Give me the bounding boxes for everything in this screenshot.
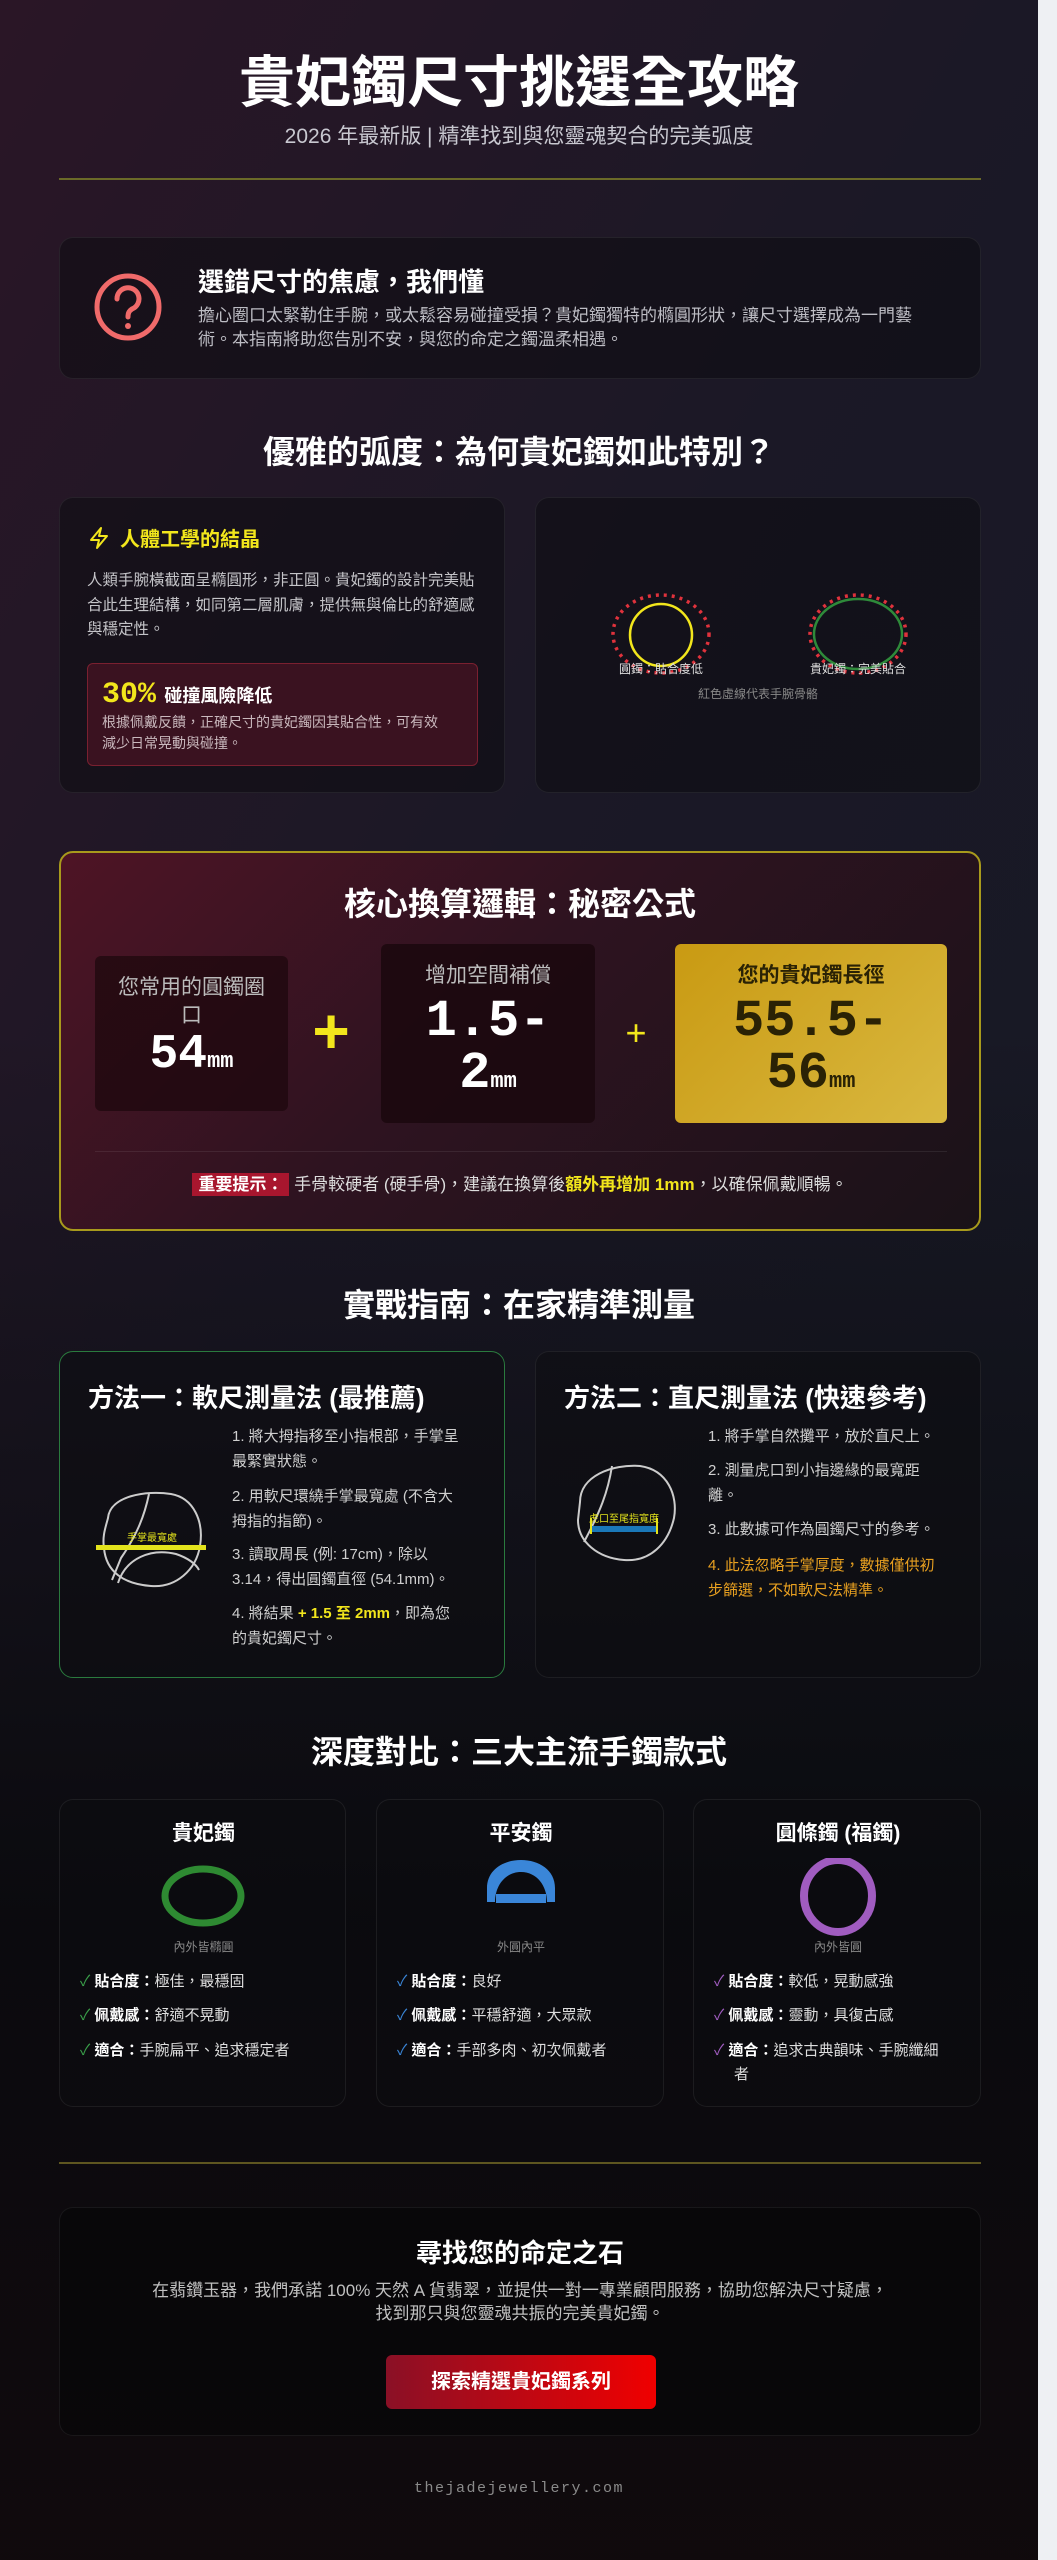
- heading: 核心換算邏輯：秘密公式: [344, 886, 696, 922]
- box: compensation: [381, 944, 595, 1123]
- box: compensation: 2mm: [459, 1044, 517, 1103]
- box: result: 56mm: [767, 1044, 855, 1103]
- stat callout: 30% 碰撞風險降低: [102, 678, 272, 712]
- stat callout: 根據佩戴反饋，正確尺寸的貴妃鐲因其貼合性，可有效減少日常晃動與碰撞。: [102, 714, 438, 751]
- panel: ping an: ✓ 貼合度：良好: [397, 1973, 501, 1990]
- panel: round bangle: 圓條鐲 (福鐲): [776, 1822, 900, 1845]
- panel: guifei: ✓ 佩戴感：舒適不晃動: [80, 2007, 229, 2024]
- icon: plus: +: [312, 995, 350, 1067]
- heading: measuring: 實戰指南：在家精準測量: [343, 1287, 695, 1323]
- panel: ping an: ✓ 佩戴感：平穩舒適，大眾款: [397, 2007, 591, 2024]
- diagram: [611, 593, 908, 701]
- title: 貴妃鐲尺寸挑選全攻略: [239, 51, 799, 114]
- box: compensation: 增加空間補償: [425, 964, 551, 987]
- box: current size: [95, 956, 288, 1111]
- steps: 1. 將手掌自然攤平，放於直尺上。: [708, 1428, 935, 1445]
- button: [386, 2355, 656, 2409]
- panel: CTA: 在翡鑽玉器，我們承諾 100% 天然 A 貨翡翠，並提供一對一專業顧問服務，協助您解決尺寸疑慮，: [152, 2281, 888, 2300]
- stat callout: [87, 663, 478, 766]
- heading: why special: 優雅的弧度：為何貴妃鐲如此特別？: [263, 434, 775, 470]
- button: 探索精選貴妃鐲系列: [431, 2371, 611, 2393]
- tip: 重要提示： 手骨較硬者 (硬手骨)，建議在換算後額外再增加 1mm，以確保佩戴順暢。: [198, 1175, 848, 1194]
- box: current size: 54mm: [149, 1028, 234, 1082]
- icon: question: [94, 274, 162, 340]
- footer: thejadejewellery.com: [414, 2480, 624, 2497]
- heading: 人體工學的結晶: [120, 529, 260, 551]
- features: ✓ 貼合度：極佳，最穩固: [80, 1973, 244, 1990]
- text: 人類手腕橫截面呈橢圓形，非正圓。貴妃鐲的設計完美貼合此生理結構，如同第二層肌膚，提供無與倫比的舒適感與穩定性。: [87, 572, 475, 638]
- heading: 方法一：軟尺測量法 (最推薦): [88, 1383, 425, 1413]
- panel: ping an: ✓ 適合：手部多肉、初次佩戴者: [397, 2042, 606, 2059]
- diagram: 紅色虛線代表手腕骨骼: [698, 686, 818, 701]
- panel: method 1: 2. 用軟尺環繞手掌最寬處 (不含大拇指的指節)。: [232, 1488, 453, 1530]
- panel: method 2: [535, 1351, 981, 1678]
- icon: round bangle: [800, 1858, 876, 1936]
- heading: 選錯尺寸的焦慮，我們懂: [198, 267, 484, 297]
- icon: plus small: +: [625, 1012, 647, 1053]
- panel: ping an: 平安鐲: [490, 1822, 552, 1845]
- icon: hand ruler: 虎口至尾指寬度: [589, 1512, 659, 1525]
- panel: method 1: 4. 將結果 + 1.5 至 2mm，即為您的貴妃鐲尺寸。: [232, 1605, 450, 1646]
- diagram: 圓鐲：貼合度低: [619, 661, 703, 676]
- panel: ping an: 外圓內平: [497, 1940, 545, 1954]
- panel: CTA: 尋找您的命定之石: [416, 2238, 624, 2268]
- panel: method 2: 3. 此數據可作為圓鐲尺寸的參考。: [708, 1521, 935, 1538]
- panel: method 1: 3. 讀取周長 (例: 17cm)，除以 3.14，得出圓鐲直徑 (54.1mm)。: [232, 1546, 450, 1588]
- heading: 方法二：直尺測量法 (快速參考): [564, 1383, 927, 1413]
- panel: guifei: 內外皆橢圓: [173, 1940, 234, 1954]
- panel: guifei: 貴妃鐲: [172, 1822, 235, 1845]
- panel: round bangle: [693, 1799, 981, 2107]
- panel: shape diagram: [535, 497, 981, 793]
- panel: CTA: 找到那只與您靈魂共振的完美貴妃鐲。: [376, 2304, 664, 2323]
- box: compensation: 1.5-: [426, 992, 550, 1051]
- panel: round bangle: ✓ 佩戴感：靈動，具復古感: [714, 2007, 893, 2024]
- icon: hand soft tape: [96, 1492, 206, 1588]
- panel: round bangle: ✓ 貼合度：較低，晃動感強: [714, 1973, 893, 1990]
- icon: oval bangle: [162, 1866, 244, 1926]
- panel: method 2: 4. 此法忽略手掌厚度，數據僅供初步篩選，不如軟尺法精準。: [708, 1557, 935, 1598]
- box: current size: 您常用的圓鐲圈口: [118, 976, 265, 1027]
- box: result: 您的貴妃鐲長徑: [738, 964, 884, 987]
- panel: round bangle: ✓ 適合：追求古典韻味、手腕纖細者: [714, 2042, 938, 2083]
- panel: anxiety: [59, 237, 981, 379]
- panel: CTA: [59, 2207, 981, 2436]
- panel: method 2: 2. 測量虎口到小指邊緣的最寬距離。: [708, 1462, 920, 1504]
- text: 擔心圈口太緊勒住手腕，或太鬆容易碰撞受損？貴妃鐲獨特的橢圓形狀，讓尺寸選擇成為一門藝術。本指南將助您告別不安，與您的命定之鐲溫柔相遇。: [198, 306, 912, 349]
- panel: formula: [59, 851, 981, 1231]
- panel: guifei: ✓ 適合：手腕扁平、追求穩定者: [80, 2042, 289, 2059]
- icon: flat inner bangle: [487, 1860, 555, 1903]
- subtitle: 2026 年最新版 | 精準找到與您靈魂契合的完美弧度: [285, 125, 753, 148]
- steps: 1. 將大拇指移至小指根部，手掌呈最緊實狀態。: [232, 1428, 459, 1470]
- panel: ergonomics: [59, 497, 505, 793]
- panel: ping an: [376, 1799, 664, 2107]
- panel: round bangle: 內外皆圓: [814, 1940, 862, 1954]
- panel: method 1: [59, 1351, 505, 1678]
- box: result: 55.5-: [733, 992, 889, 1051]
- icon: hand soft tape: 手掌最寬處: [127, 1531, 177, 1544]
- icon: hand ruler: [577, 1464, 676, 1562]
- panel: guifei: [59, 1799, 346, 2107]
- heading: comparison: 深度對比：三大主流手鐲款式: [311, 1734, 727, 1770]
- diagram: 貴妃鐲：完美貼合: [810, 661, 906, 676]
- box: result: [675, 944, 947, 1123]
